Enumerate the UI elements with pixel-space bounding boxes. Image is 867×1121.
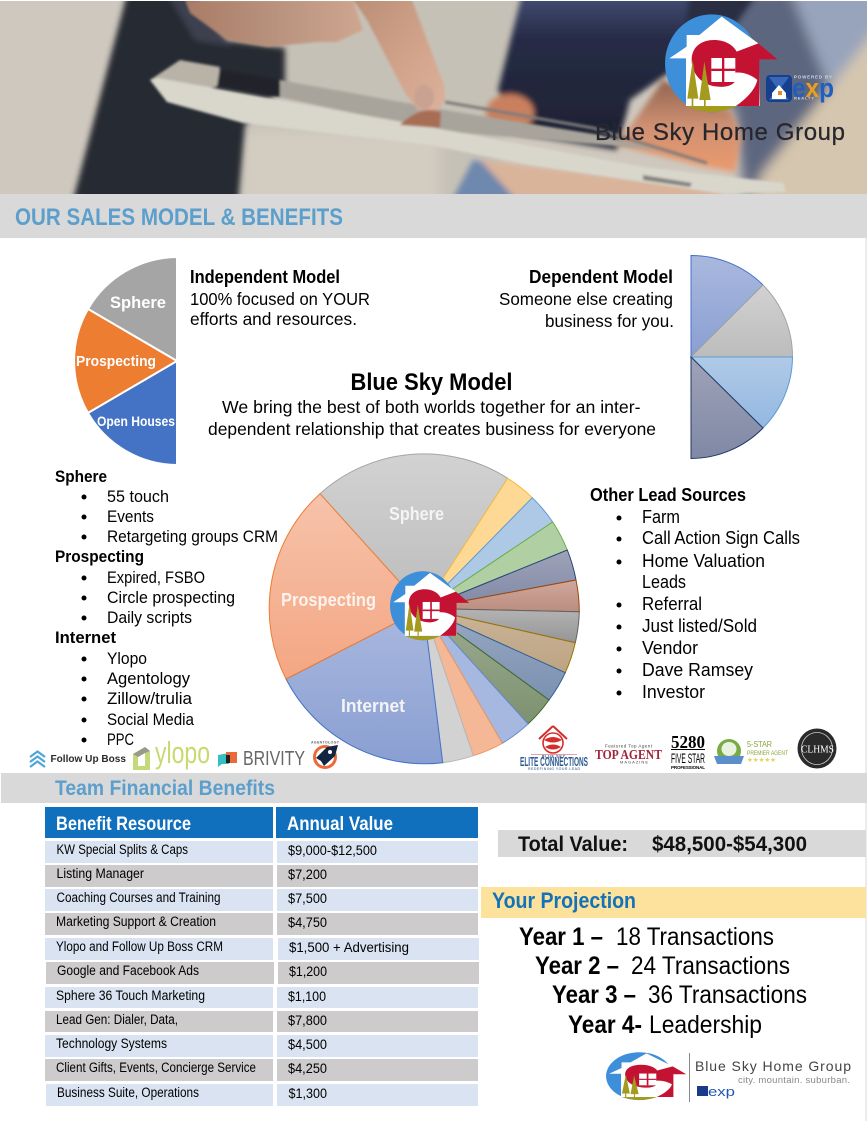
list: sphere prospecting internet: 55 touch [107, 487, 169, 506]
logo: top agent magazine [595, 744, 663, 764]
table rows: Coaching Courses and Training [56, 890, 220, 905]
list: other lead sources: Other Lead Sources [590, 485, 746, 505]
projection list by year: Year 4- [568, 1011, 642, 1039]
text block: dependent model: Dependent Model [529, 267, 673, 287]
text block: dependent model [499, 267, 674, 331]
list: sphere prospecting internet: Zillow/trulia [107, 689, 193, 708]
logo: brivity: BRIVITY [243, 748, 305, 770]
logo: 5-star premier agent: ★★★★★ [747, 756, 776, 764]
footer logo text: Blue Sky Home Group [695, 1058, 851, 1074]
logo: eXp Realty (hero): REALTY [794, 96, 814, 100]
footer logo text [689, 1053, 851, 1102]
table rows: Marketing Support & Creation [56, 914, 216, 929]
text block: dependent model: Someone else creating [499, 289, 673, 309]
footer logo text: city. mountain. suburban. [738, 1075, 850, 1086]
logo: 5280 five star professional: PROFESSIONAL [671, 765, 705, 770]
your projection heading: Your Projection [492, 888, 636, 913]
list: sphere prospecting internet: Retargeting groups CRM [107, 527, 278, 546]
projection list by year: Year 1 – [519, 923, 603, 951]
list: sphere prospecting internet [55, 467, 278, 749]
table rows: Ylopo and Follow Up Boss CRM [56, 939, 223, 954]
your projection heading [481, 887, 866, 918]
table rows: KW Special Splits & Caps [56, 842, 188, 857]
list: other lead sources: Home Valuation [642, 551, 765, 571]
table rows: $1,300 [288, 1086, 327, 1101]
list: other lead sources: Investor [642, 682, 705, 702]
list: sphere prospecting internet: Social Media [107, 710, 194, 729]
logo: agentology: AGENTOLOGY [311, 740, 340, 744]
logo: 5-star premier agent [714, 739, 788, 764]
logo: 5280 five star professional [671, 732, 705, 770]
pie chart: independent model: Open Houses [97, 414, 175, 429]
list: sphere prospecting internet: Ylopo [107, 649, 147, 668]
pie chart: blue sky model [269, 454, 579, 764]
logo: footer house mark [606, 1052, 686, 1100]
section band: our sales model and benefits [0, 194, 867, 238]
table rows: $1,200 [289, 964, 327, 979]
text block: blue sky model: dependent relationship that creates business for everyone [208, 419, 656, 439]
logo: elite connections: ELITE CONNECTIONS [520, 755, 588, 769]
list: sphere prospecting internet: Circle prospecting [107, 588, 235, 607]
page edge line [865, 238, 867, 1121]
text block: dependent model: business for you. [545, 311, 674, 331]
projection list by year: Year 3 – [552, 981, 636, 1009]
total value bar [498, 830, 866, 857]
list: sphere prospecting internet: Prospecting [55, 547, 144, 566]
table header: Annual Value [287, 814, 393, 835]
pie chart: independent model [74, 257, 177, 465]
logo: elite connections [520, 726, 588, 771]
logo: CLHMS seal: CLHMS [801, 744, 834, 756]
table rows: Listing Manager [56, 866, 144, 881]
projection list by year: 18 Transactions [616, 923, 774, 951]
logo: ylopo [133, 735, 210, 770]
table rows: $1,500 + Advertising [289, 940, 409, 955]
logo: top agent magazine: Featured Top Agent [605, 744, 653, 748]
list: other lead sources [590, 485, 800, 702]
logo: eXp Realty (hero): POWERED BY [794, 74, 832, 80]
text block: independent model: Independent Model [190, 267, 340, 287]
section band: team financial benefits [1, 773, 867, 803]
list: other lead sources: Referral [642, 594, 702, 614]
text: FIVE STAR [671, 750, 705, 766]
logo text: Blue Sky Home Group: Blue Sky Home Group [595, 119, 845, 146]
logo: CLHMS seal [798, 728, 836, 768]
table rows: Business Suite, Operations [57, 1085, 199, 1100]
table rows: $7,800 [288, 1013, 327, 1028]
list: other lead sources: Vendor [642, 638, 698, 658]
text block: independent model: 100% focused on YOUR [190, 289, 370, 309]
projection list by year: 36 Transactions [648, 981, 807, 1009]
logo: 5280 five star professional: 5280 [671, 732, 705, 752]
logo: top agent magazine: MAGAZINE [620, 760, 648, 764]
list: other lead sources: Dave Ramsey [642, 660, 753, 680]
list: other lead sources: Just listed/Sold [642, 616, 757, 636]
table header [45, 807, 478, 838]
list: sphere prospecting internet: Daily scripts [107, 608, 192, 627]
logo: house mark at pie centre [390, 571, 469, 640]
table rows: $4,750 [288, 915, 327, 930]
projection list by year [519, 923, 807, 1039]
logo: 5-star premier agent: PREMIER AGENT [747, 750, 788, 757]
table rows: $4,250 [288, 1061, 327, 1076]
logo: follow up boss: Follow Up Boss [50, 753, 126, 765]
text block: blue sky model: Blue Sky Model [350, 369, 512, 396]
logo: follow up boss [30, 752, 126, 767]
text block: independent model: efforts and resources. [190, 309, 357, 329]
pie chart: blue sky model: Internet [341, 696, 405, 716]
hero photo: finger touching tablet [0, 0, 867, 210]
text block: independent model [190, 267, 370, 329]
list: sphere prospecting internet: Events [107, 507, 154, 526]
table rows: Lead Gen: Dialer, Data, [56, 1012, 178, 1027]
logo: elite connections: REDEFINING YOUR LEAD [528, 767, 580, 771]
table rows: $1,100 [288, 989, 326, 1004]
logo: Blue Sky Home Group house mark (hero) [665, 14, 777, 112]
table rows: Technology Systems [56, 1036, 167, 1051]
list: other lead sources: Call Action Sign Calls [642, 528, 800, 548]
table rows: $7,500 [288, 891, 327, 906]
table header: Benefit Resource [56, 814, 191, 835]
list: other lead sources: Leads [642, 572, 686, 592]
list: sphere prospecting internet: Agentology [107, 669, 190, 688]
footer logo text: exp [708, 1084, 735, 1099]
list: sphere prospecting internet: PPC [107, 730, 134, 749]
table rows: $7,200 [288, 867, 327, 882]
logo: eXp Realty (hero): exp [792, 73, 834, 103]
pie chart: dependent model [691, 255, 793, 458]
pie chart: blue sky model: Sphere [389, 504, 444, 524]
pie chart: independent model: Prospecting [76, 353, 156, 370]
projection list by year: Year 2 – [535, 952, 619, 980]
heading: team financial benefits: Team Financial Benefits [55, 777, 275, 800]
table rows: Sphere 36 Touch Marketing [56, 988, 205, 1003]
pie chart: independent model: Sphere [110, 293, 166, 312]
table rows: $4,500 [288, 1037, 327, 1052]
list: sphere prospecting internet: Internet [55, 628, 116, 647]
table rows: Client Gifts, Events, Concierge Service [56, 1060, 256, 1075]
logo: elite connections: BLUE SKY [542, 754, 566, 758]
logo: 5-star premier agent: 5-STAR [747, 740, 772, 749]
list: sphere prospecting internet: Sphere [55, 467, 107, 486]
list: sphere prospecting internet: Expired, FSBO [107, 568, 205, 587]
table rows: Google and Facebook Ads [57, 963, 199, 978]
pie chart: blue sky model: Prospecting [281, 590, 376, 610]
list: other lead sources: Farm [642, 507, 680, 527]
text block: blue sky model: We bring the best of both worlds together for an inter- [222, 397, 641, 417]
table rows: $9,000-$12,500 [288, 843, 377, 858]
total value bar: Total Value: [518, 833, 628, 856]
logo: eXp Realty (hero) [766, 73, 834, 103]
logo: top agent magazine: TOP AGENT [595, 748, 663, 763]
projection list by year: 24 Transactions [631, 952, 790, 980]
text block: blue sky model [208, 369, 656, 439]
heading: our sales model and benefits: OUR SALES MODEL & BENEFITS [15, 204, 343, 231]
logo: agentology [311, 740, 340, 768]
logo: ylopo: ylopo [155, 735, 210, 770]
total value bar: $48,500-$54,300 [652, 833, 807, 856]
projection list by year: Leadership [649, 1011, 762, 1039]
table: benefit resources and annual values [45, 807, 479, 1106]
table rows [45, 841, 479, 1106]
logo: brivity [218, 748, 305, 770]
